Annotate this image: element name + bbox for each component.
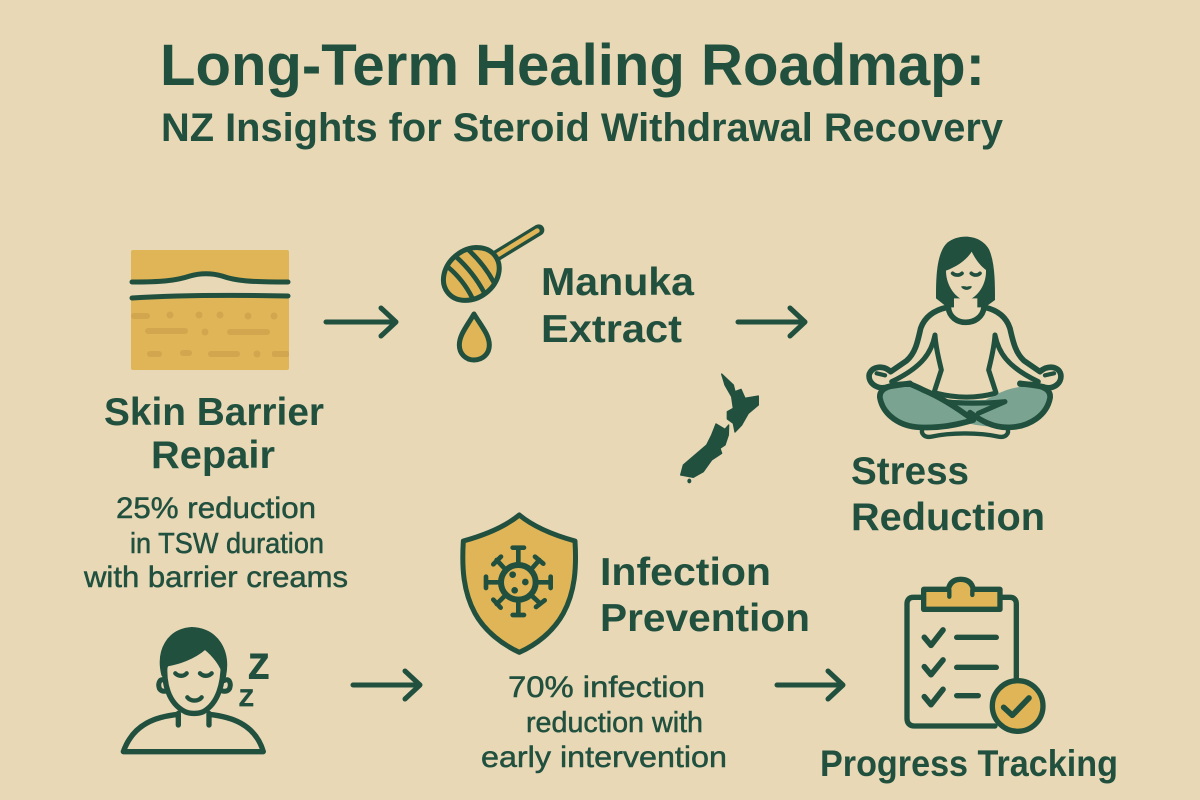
text: barrier statistic [83, 492, 348, 594]
icon: sleeping person [123, 628, 269, 752]
title: NZ Insights for Steroid Withdrawal Recovery [161, 106, 1004, 150]
icon: honey dipper [433, 230, 539, 360]
arrow: skin to manuka [326, 308, 396, 336]
icon: skin layers [131, 250, 289, 370]
title: Long-Term Healing Roadmap: [160, 33, 985, 98]
heading: skin barrier repair: Skin Barrier [104, 391, 324, 434]
heading: manuka extract [541, 261, 694, 351]
heading: stress reduction [851, 450, 1045, 539]
arrow: infection to progress [777, 671, 843, 699]
text: barrier statistic: in TSW duration [130, 528, 324, 560]
icon: sleeping person: Z [239, 685, 254, 712]
icon: sleeping person: Z [248, 648, 269, 687]
heading: skin barrier repair [104, 391, 324, 477]
heading: manuka extract: Manuka [541, 261, 694, 304]
icon: clipboard checklist [907, 579, 1043, 731]
title [160, 33, 1004, 150]
heading: stress reduction: Stress [851, 450, 969, 493]
heading: infection prevention: Prevention [600, 597, 810, 640]
arrow: sleep to infection [353, 671, 420, 699]
arrow: manuka to stress [738, 308, 805, 336]
heading: infection prevention: Infection [600, 551, 771, 594]
text: infection statistic: reduction with [526, 707, 703, 739]
heading: stress reduction: Reduction [851, 496, 1045, 539]
icon: meditating person [869, 237, 1061, 437]
icon: shield with virus [463, 515, 576, 652]
heading: manuka extract: Extract [541, 308, 682, 351]
heading: progress tracking: Progress Tracking [820, 743, 1118, 784]
heading: skin barrier repair: Repair [151, 434, 275, 477]
text: infection statistic: 70% infection [508, 671, 705, 704]
text: barrier statistic: with barrier creams [83, 561, 348, 594]
text: barrier statistic: 25% reduction [116, 492, 316, 525]
text: infection statistic [481, 671, 727, 774]
icon: new zealand map [681, 374, 758, 483]
text: infection statistic: early intervention [481, 741, 727, 774]
heading: infection prevention [600, 551, 810, 640]
